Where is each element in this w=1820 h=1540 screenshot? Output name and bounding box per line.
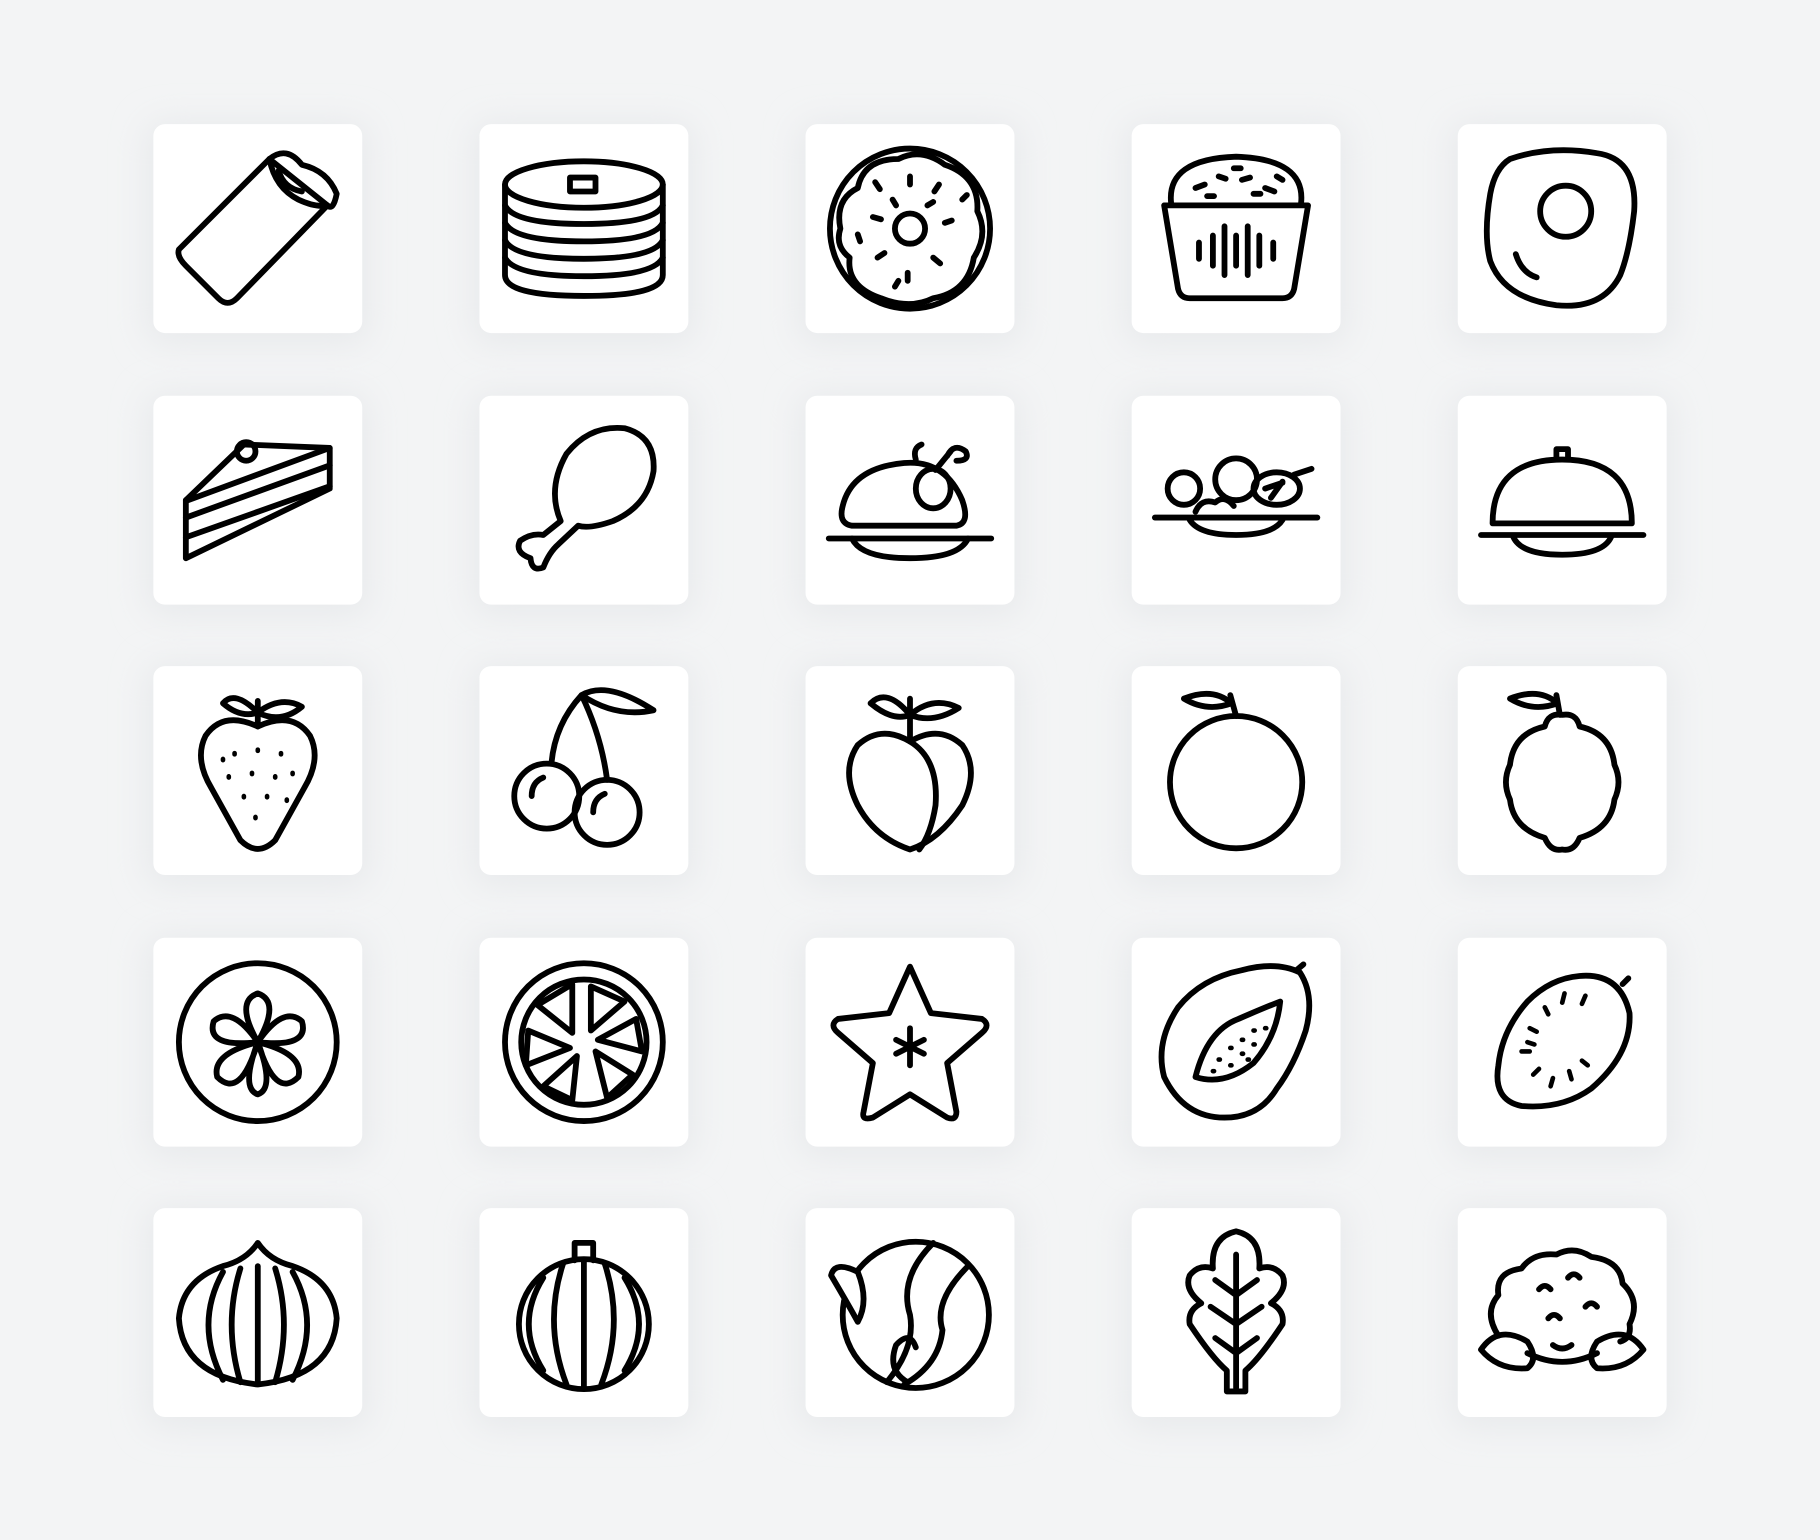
tile: peach [799,664,1021,887]
tile: muffin [1125,122,1348,345]
tile: egg [1451,122,1674,345]
tile: strawberry [146,664,369,887]
tile: citrus cross-section [146,935,369,1158]
icon: plate with vegetables [1155,458,1317,535]
icon: muffin [1164,157,1308,298]
icon: kiwi [1497,976,1630,1106]
tile: orange [1125,664,1348,887]
icon: lettuce leaf [1188,1231,1284,1391]
tile: turkey [799,393,1021,616]
tile: cauliflower [1451,1206,1674,1429]
icon: fried egg [1487,150,1634,306]
icon: lemon [1506,694,1618,850]
tile: cherries [472,664,695,887]
icon: cherries [514,690,654,845]
icon: fig [519,1243,649,1389]
icon: pancakes [505,161,663,296]
icon: peach [849,697,971,849]
tile: starfruit [799,935,1021,1158]
tile: kiwi [1451,935,1674,1158]
icon: orange slice [505,963,663,1121]
tile: cake [146,393,369,616]
icon: cabbage [831,1242,989,1388]
icon: donut [830,149,990,309]
icon: cloche [1481,449,1643,555]
tile: cabbage [799,1206,1021,1429]
tile: lemon [1451,664,1674,887]
icon: roast turkey [829,444,991,558]
icon: burrito [178,153,337,303]
tile: onion [146,1206,369,1429]
icon: cake slice [186,442,330,558]
icon: starfruit [833,967,987,1119]
tile: drumstick [472,393,695,616]
icon: strawberry [201,698,315,849]
icon: orange [1170,694,1302,848]
icon: mangosteen slice [179,963,337,1121]
tile: orange slice [472,935,695,1158]
icon: cauliflower [1481,1250,1643,1368]
tile: lettuce leaf [1125,1206,1348,1429]
icon: drumstick [519,428,654,569]
tile: burrito [146,122,369,345]
tile: cloche [1451,393,1674,616]
tile: fig [472,1206,695,1429]
tile: donut [799,122,1021,345]
tile: salad plate [1125,393,1348,616]
icon: papaya [1161,964,1309,1118]
tile: papaya [1125,935,1348,1158]
tile: pancakes [472,122,695,345]
icon: onion [179,1243,337,1384]
